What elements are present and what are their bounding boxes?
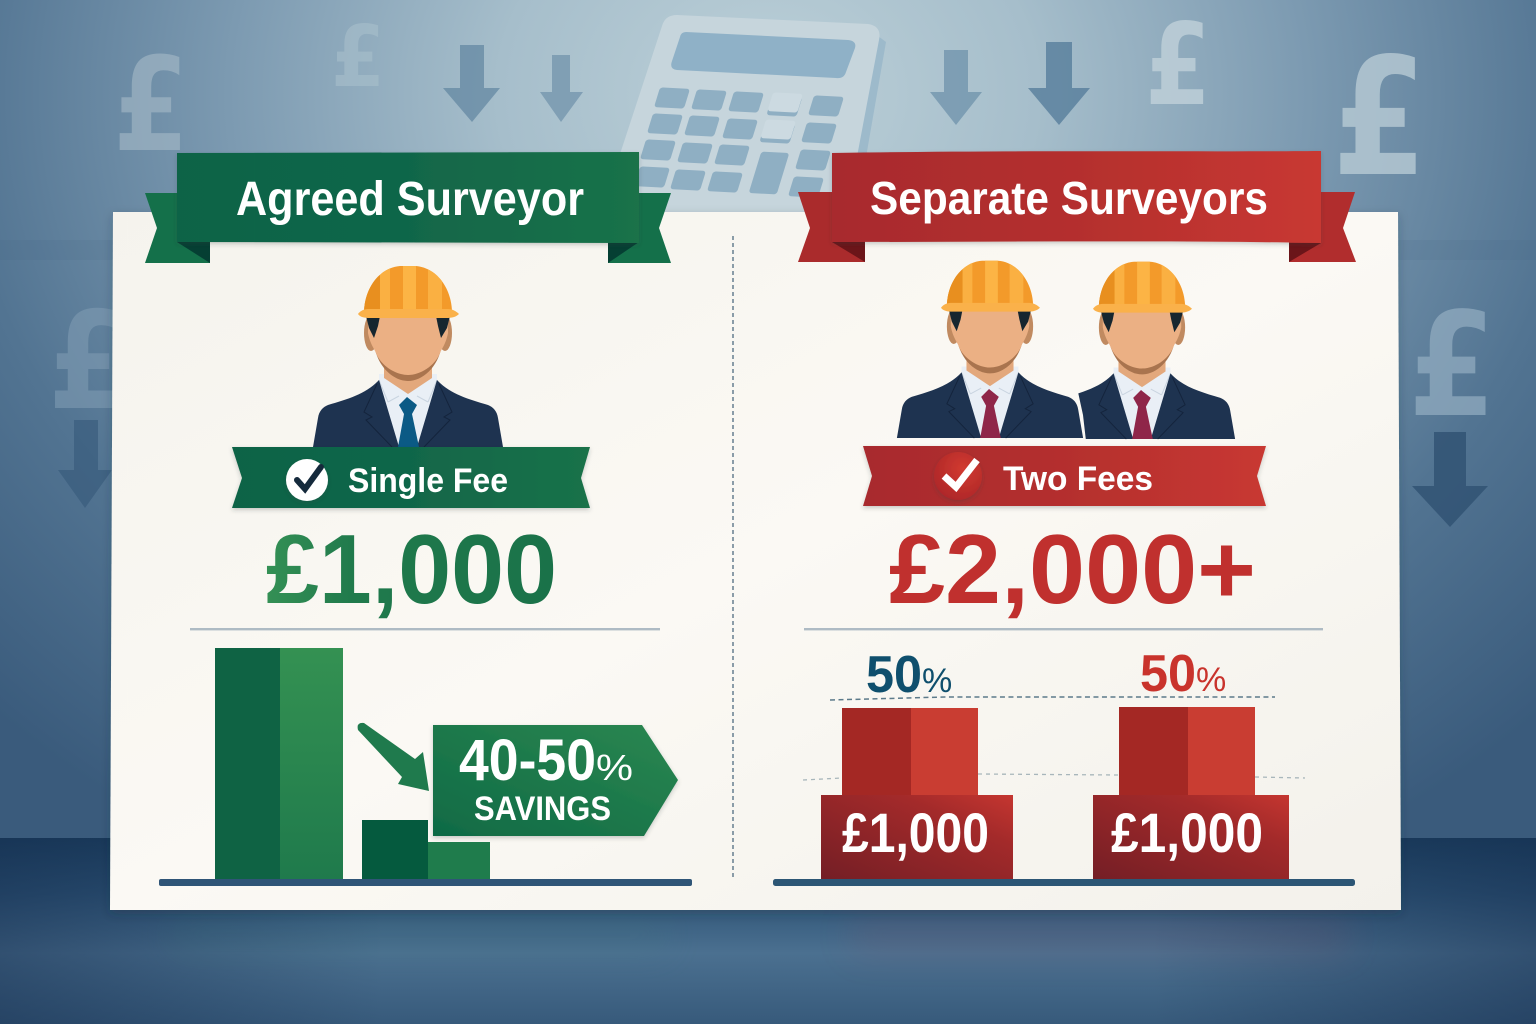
background pound signs: £: [1145, 0, 1211, 131]
callout: 40-50% savings: [433, 725, 678, 836]
arrow: down to savings: [358, 723, 429, 791]
heading ribbon: Agreed Surveyor: [145, 152, 671, 263]
background down arrows: [58, 42, 1488, 527]
heading ribbon: Agreed Surveyor: Agreed Surveyor: [236, 173, 584, 226]
stacked bar: first surveyor fee: [821, 708, 1013, 879]
panel: separate surveyors column: [773, 151, 1356, 886]
label: 50% right: 50%: [1140, 645, 1226, 703]
panel: paper comparison sheet: [110, 212, 1401, 910]
bar chart: savings comparison: [159, 648, 692, 886]
ribbon: two fees: [863, 446, 1266, 506]
callout: 40-50% savings: %: [596, 747, 633, 788]
background pound signs: [48, 0, 1496, 449]
callout: 40-50% savings: 40-50: [459, 728, 596, 793]
ribbon: single fee: [232, 447, 590, 508]
background pound signs: £: [1408, 281, 1496, 449]
background pound signs: £: [1332, 24, 1427, 213]
panel: agreed surveyor column: [145, 152, 692, 886]
icon: calculator: [600, 15, 886, 215]
background pound signs: £: [113, 29, 189, 181]
heading ribbon: Separate Surveyors: Separate Surveyors: [870, 172, 1268, 224]
stacked bar: second surveyor fee: [1093, 707, 1289, 879]
stacked bar: first surveyor fee: £1,000: [842, 801, 989, 864]
callout: 40-50% savings: SAVINGS: [474, 790, 611, 828]
stacked bar: second surveyor fee: £1,000: [1111, 801, 1263, 864]
value: £2,000+: £2,000+: [889, 514, 1256, 624]
icon: two surveyors with hard hats: [897, 257, 1235, 439]
background pound signs: £: [331, 8, 385, 107]
ribbon: two fees: Two Fees: [1003, 460, 1153, 498]
ribbon: single fee: Single Fee: [348, 462, 508, 500]
value: £1,000: £1,000: [266, 514, 557, 624]
icon: surveyor with hard hat: [313, 262, 503, 447]
background pound signs: £: [48, 283, 128, 440]
heading ribbon: Separate Surveyors: [798, 151, 1356, 262]
label: 50% left: 50%: [866, 646, 952, 704]
